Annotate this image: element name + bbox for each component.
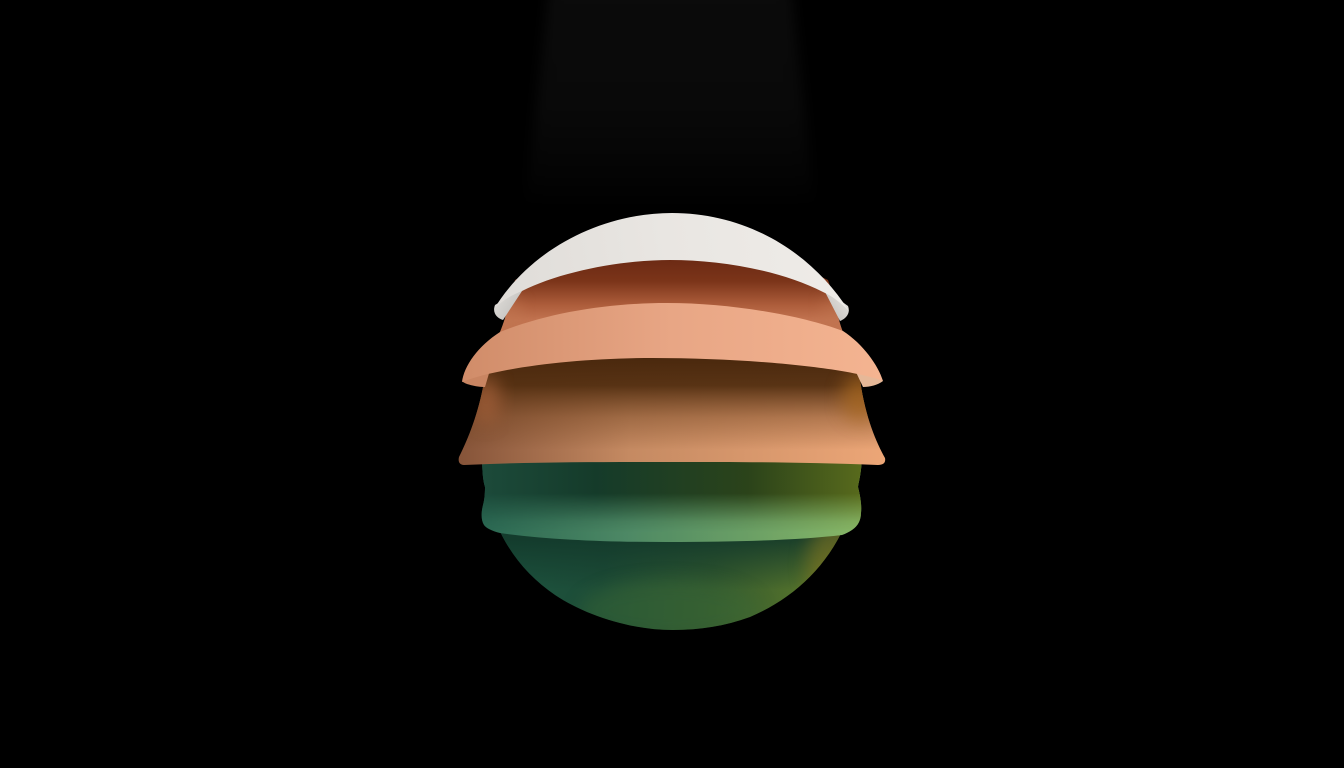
band: bottom green dome [500,533,840,630]
band: rust layer [500,260,842,332]
band: peach brim [462,303,883,387]
band: white top cap [494,213,849,321]
band: green ribbed layer [482,462,862,542]
faint light column above the sphere [525,0,815,208]
band: orange layer [458,358,886,465]
illustration: layered paper sphere on black background [458,0,886,630]
